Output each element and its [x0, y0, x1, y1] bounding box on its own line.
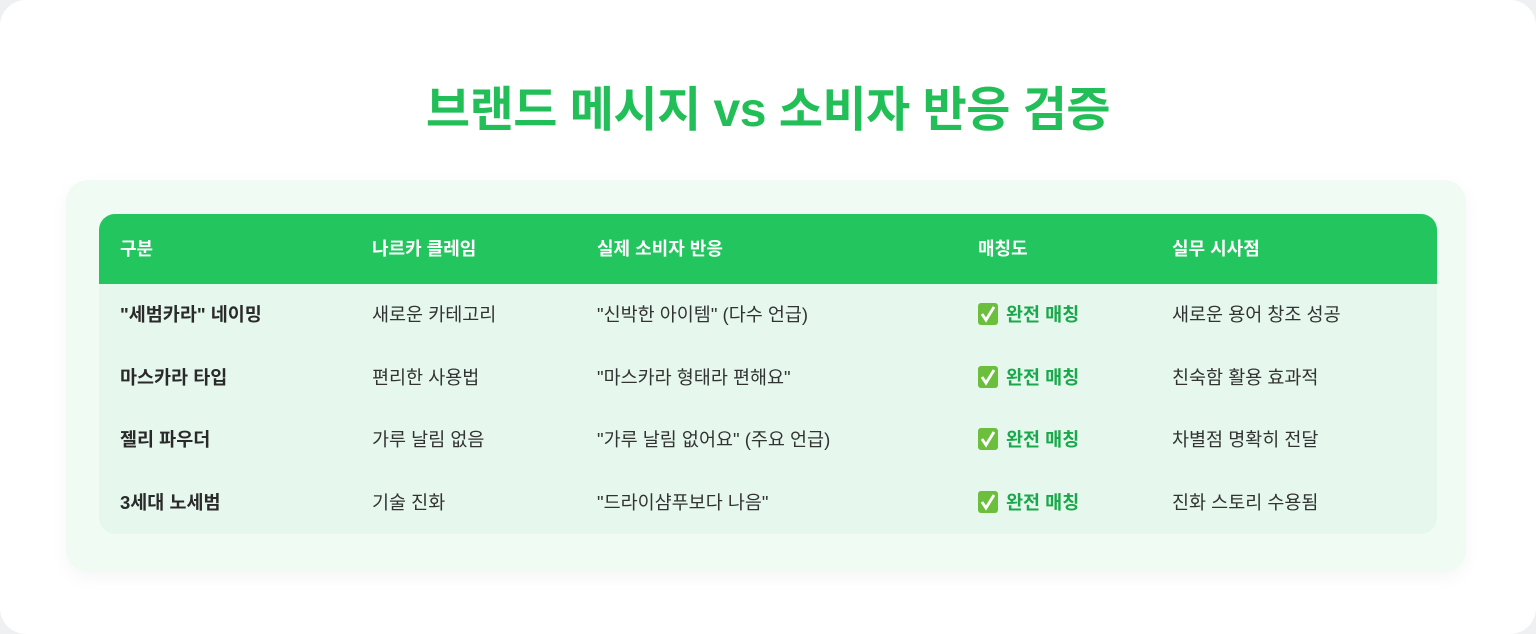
row 1: 완전 매칭 — [1006, 304, 1079, 325]
row 3: 완전 매칭 — [1006, 429, 1079, 450]
row 2: 친숙함 활용 효과적 — [1172, 367, 1318, 388]
row 1: "신박한 아이템" (다수 언급) — [597, 304, 808, 325]
row 4: 진화 스토리 수용됨 — [1172, 492, 1318, 513]
row 4: 완전 매칭 — [1006, 492, 1079, 513]
row 2: "마스카라 형태라 편해요" — [597, 367, 791, 388]
table header: 실무 시사점 — [1172, 239, 1260, 259]
table — [99, 214, 1437, 534]
row 3 — [120, 428, 1318, 450]
table header: 구분 — [120, 239, 153, 259]
row 4: 3세대 노세범 — [120, 492, 221, 513]
row 1: 새로운 용어 창조 성공 — [1172, 304, 1341, 325]
title: 브랜드 메시지 vs 소비자 반응 검증 — [426, 84, 1110, 137]
row 4 — [120, 491, 1318, 513]
row 1: "세범카라" 네이밍 — [120, 304, 262, 325]
table header: 나르카 클레임 — [372, 239, 476, 259]
row 3: 젤리 파우더 — [120, 429, 210, 450]
row 2: 마스카라 타입 — [120, 367, 227, 388]
row 1 — [120, 303, 1341, 325]
row 4: "드라이샴푸보다 나음" — [597, 492, 768, 513]
row 1: 새로운 카테고리 — [372, 304, 496, 325]
table header — [99, 214, 1437, 284]
panel: table container — [66, 180, 1466, 572]
row 2 — [120, 366, 1318, 388]
row 2: 편리한 사용법 — [372, 367, 479, 388]
table header: 매칭도 — [978, 239, 1028, 259]
row 3: "가루 날림 없어요" (주요 언급) — [597, 429, 830, 450]
row 3: 차별점 명확히 전달 — [1172, 429, 1318, 450]
row 2: 완전 매칭 — [1006, 367, 1079, 388]
row 4: 기술 진화 — [372, 492, 445, 513]
row 3: 가루 날림 없음 — [372, 429, 484, 450]
table header: 실제 소비자 반응 — [597, 239, 723, 259]
